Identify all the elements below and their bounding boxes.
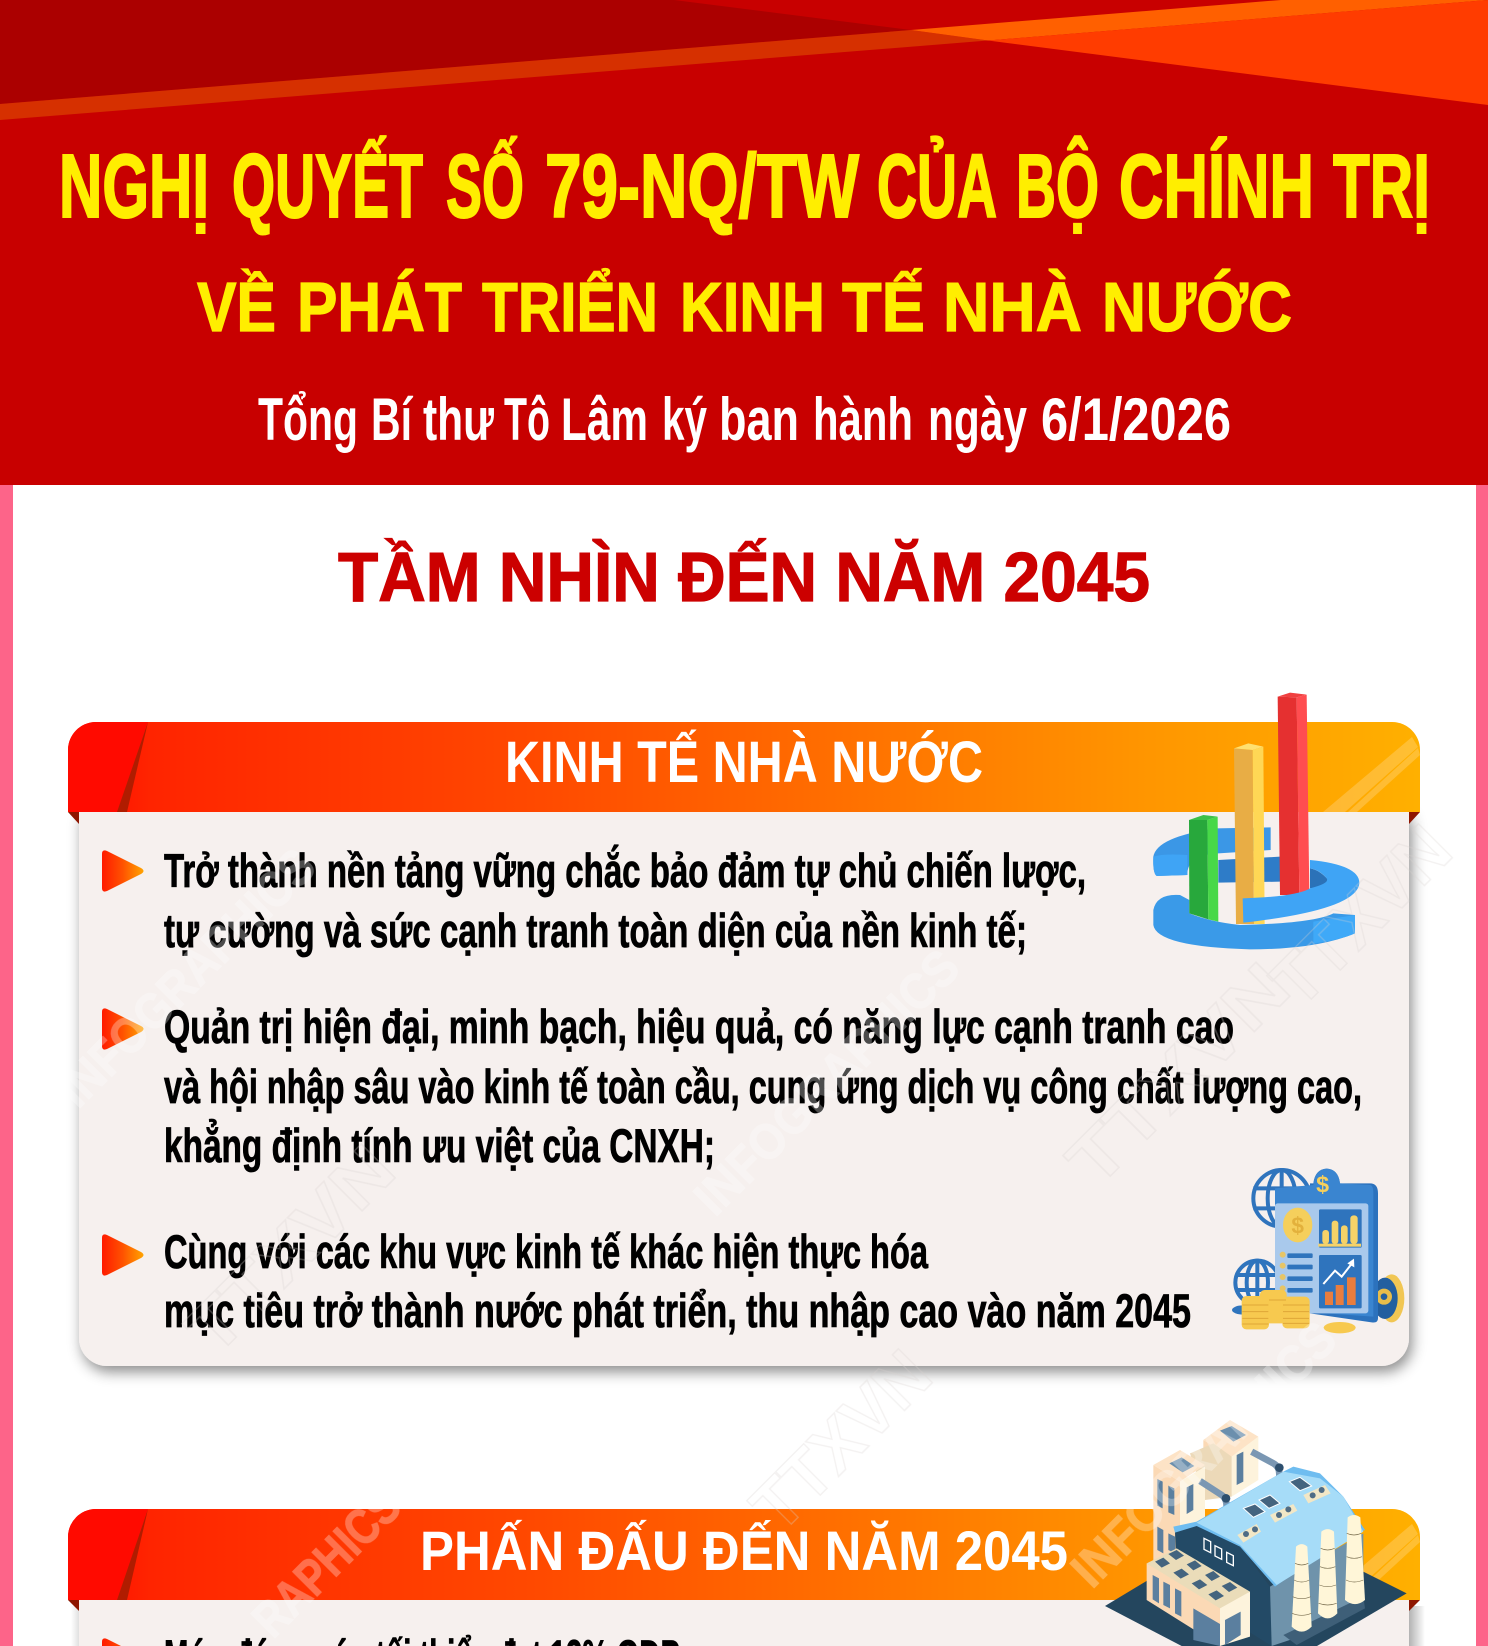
watermark outlines: TTXVN: [735, 1335, 946, 1546]
subtitle: Lâm: [561, 386, 648, 453]
watermarks: INFOGRAPHICS: [683, 939, 970, 1226]
side border: left: [0, 485, 13, 1646]
subtitle: ký: [662, 386, 707, 453]
watermark outlines: [170, 810, 1466, 1546]
main title line 1: CỦA: [877, 135, 997, 237]
watermarks: RAPHICS: [241, 1477, 412, 1646]
main title line 2: KINH: [680, 268, 825, 346]
section heading: TẦM NHÌN ĐẾN NĂM 2045: [338, 538, 1150, 616]
main title line 2: TRIỂN: [482, 267, 658, 346]
subtitle: hành: [813, 386, 913, 453]
main title line 1: 79-NQ/TW: [545, 137, 859, 237]
main title line 1: QUYẾT: [232, 135, 423, 237]
icon: finance report: [1232, 1169, 1404, 1333]
watermarks: INFOGRAPHICS: [46, 838, 326, 1118]
watermarks: [46, 838, 1347, 1646]
main title line 2: NHÀ: [943, 268, 1082, 346]
side border: right: [1476, 485, 1488, 1646]
icon: 3D bar chart: [1153, 693, 1359, 949]
main title line 1: CHÍNH: [1119, 136, 1314, 237]
main title line 1: [59, 135, 1430, 237]
header banner: [0, 0, 1488, 485]
watermarks: INFOGRAPHICS: [1060, 1311, 1347, 1598]
subtitle: thư: [423, 386, 494, 453]
bullet text 3 line 1: Cùng với các khu vực kinh tế khác hiện thực hóa: [164, 1225, 929, 1278]
icon: isometric factory: [1105, 1420, 1407, 1646]
bullet 4: [102, 1638, 121, 1646]
main title line 1: NGHỊ: [59, 137, 209, 237]
bullet text 1 line 2: tự cường và sức cạnh tranh toàn diện của nền kinh tế;: [164, 904, 1027, 957]
bullet 1: [102, 850, 144, 892]
panel: Phấn đấu đến năm 2045: [68, 1509, 1425, 1646]
main title line 1: BỘ: [1016, 135, 1099, 237]
main title line 2: [197, 267, 1292, 346]
watermark outlines: TTXVN: [1051, 947, 1305, 1201]
panel heading: PHẤN ĐẤU ĐẾN NĂM 2045: [420, 1519, 1068, 1582]
watermark outlines: TTXVN: [1255, 810, 1466, 1021]
bullet 3: [102, 1234, 144, 1276]
main title line 2: NƯỚC: [1102, 268, 1292, 346]
main title line 1: SỐ: [446, 135, 524, 237]
panel header bar: [68, 1509, 1420, 1600]
panel header bar: [68, 722, 1420, 812]
bullet text 2 line 3: khẳng định tính ưu việt của CNXH;: [164, 1119, 715, 1172]
subtitle: 6/1/2026: [1041, 386, 1231, 453]
subtitle: Tô: [504, 386, 550, 453]
main title line 2: TẾ: [842, 268, 925, 346]
main title line 1: TRỊ: [1333, 137, 1430, 237]
subtitle: ngày: [928, 386, 1027, 453]
panel: Kinh tế nhà nước: [68, 722, 1420, 1366]
bullet 2: [102, 1008, 144, 1050]
main title line 2: VỀ: [197, 268, 276, 346]
bullet text 1 line 1: Trở thành nền tảng vững chắc bảo đảm tự chủ chiến lược,: [164, 844, 1086, 897]
subtitle: Bí: [371, 386, 414, 453]
icon: finance report: $: [1316, 1172, 1329, 1198]
watermark outlines: TTXVN: [170, 1130, 409, 1369]
subtitle: ban: [719, 386, 799, 453]
subtitle: Tổng: [258, 386, 358, 453]
panel heading: KINH TẾ NHÀ NƯỚC: [505, 730, 983, 795]
main title line 2: PHÁT: [297, 268, 462, 346]
icon: finance report: $: [1291, 1212, 1304, 1238]
subtitle: [258, 386, 1231, 453]
